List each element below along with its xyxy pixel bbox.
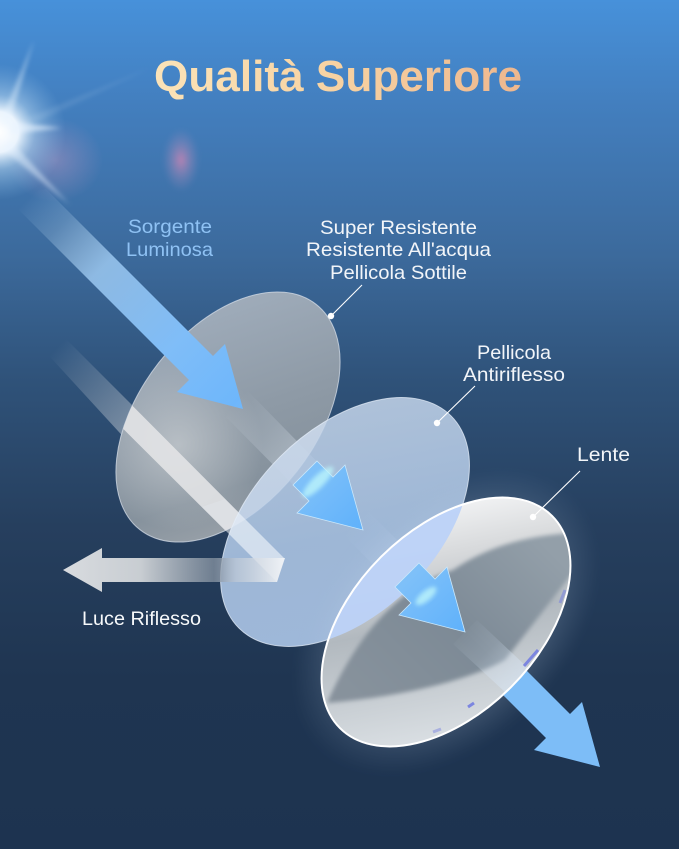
leader line: protective film <box>328 285 362 319</box>
label: lens: Lente <box>577 444 630 466</box>
faint reflected beam below the first disc <box>202 499 284 582</box>
second film disc <box>220 397 470 647</box>
lens rim <box>275 451 617 793</box>
reflected beam outside the first disc <box>41 335 184 479</box>
reflected light arrow <box>63 548 285 592</box>
label: light source: Luminosa <box>126 239 213 261</box>
label: protective film: Pellicola Sottile <box>330 262 467 284</box>
label: anti-reflective film: Pellicola <box>477 342 551 364</box>
lens <box>320 496 572 748</box>
label: light source <box>126 216 213 261</box>
rim colour accents <box>433 590 565 732</box>
label: anti-reflective film: Antiriflesso <box>463 364 565 386</box>
first film disc <box>26 194 341 542</box>
third light arrow <box>395 563 465 632</box>
beam between first and second disc <box>226 386 332 501</box>
icon: sun flare <box>0 40 200 205</box>
incoming light arrow <box>6 189 243 409</box>
refraction glow <box>299 463 337 501</box>
lens dark inner area <box>327 533 575 703</box>
beam inside the lens <box>464 631 527 692</box>
reflected beam inside the first disc <box>123 406 238 530</box>
title: Qualità Superiore <box>154 52 522 101</box>
refraction glow <box>413 584 439 608</box>
reflected beam through second disc <box>230 513 284 582</box>
label: reflected light: Luce Riflesso <box>82 608 201 630</box>
label: protective film: Resistente All'acqua <box>306 239 491 261</box>
label: protective film: Super Resistente <box>320 217 477 239</box>
icon: lens flare spot <box>162 128 200 192</box>
label: anti-reflective film <box>463 342 565 386</box>
label: light source: Sorgente <box>128 216 212 238</box>
second disc seen through the lens <box>330 506 462 639</box>
second light arrow <box>293 461 363 530</box>
beam between second and third disc <box>340 508 436 603</box>
lens glow <box>232 408 660 836</box>
beam exiting the lens <box>500 667 600 767</box>
leader line: lens <box>530 471 580 520</box>
overlap with the first disc <box>239 421 327 520</box>
label: protective film <box>306 217 491 284</box>
leader line: anti-reflective film <box>434 386 475 426</box>
